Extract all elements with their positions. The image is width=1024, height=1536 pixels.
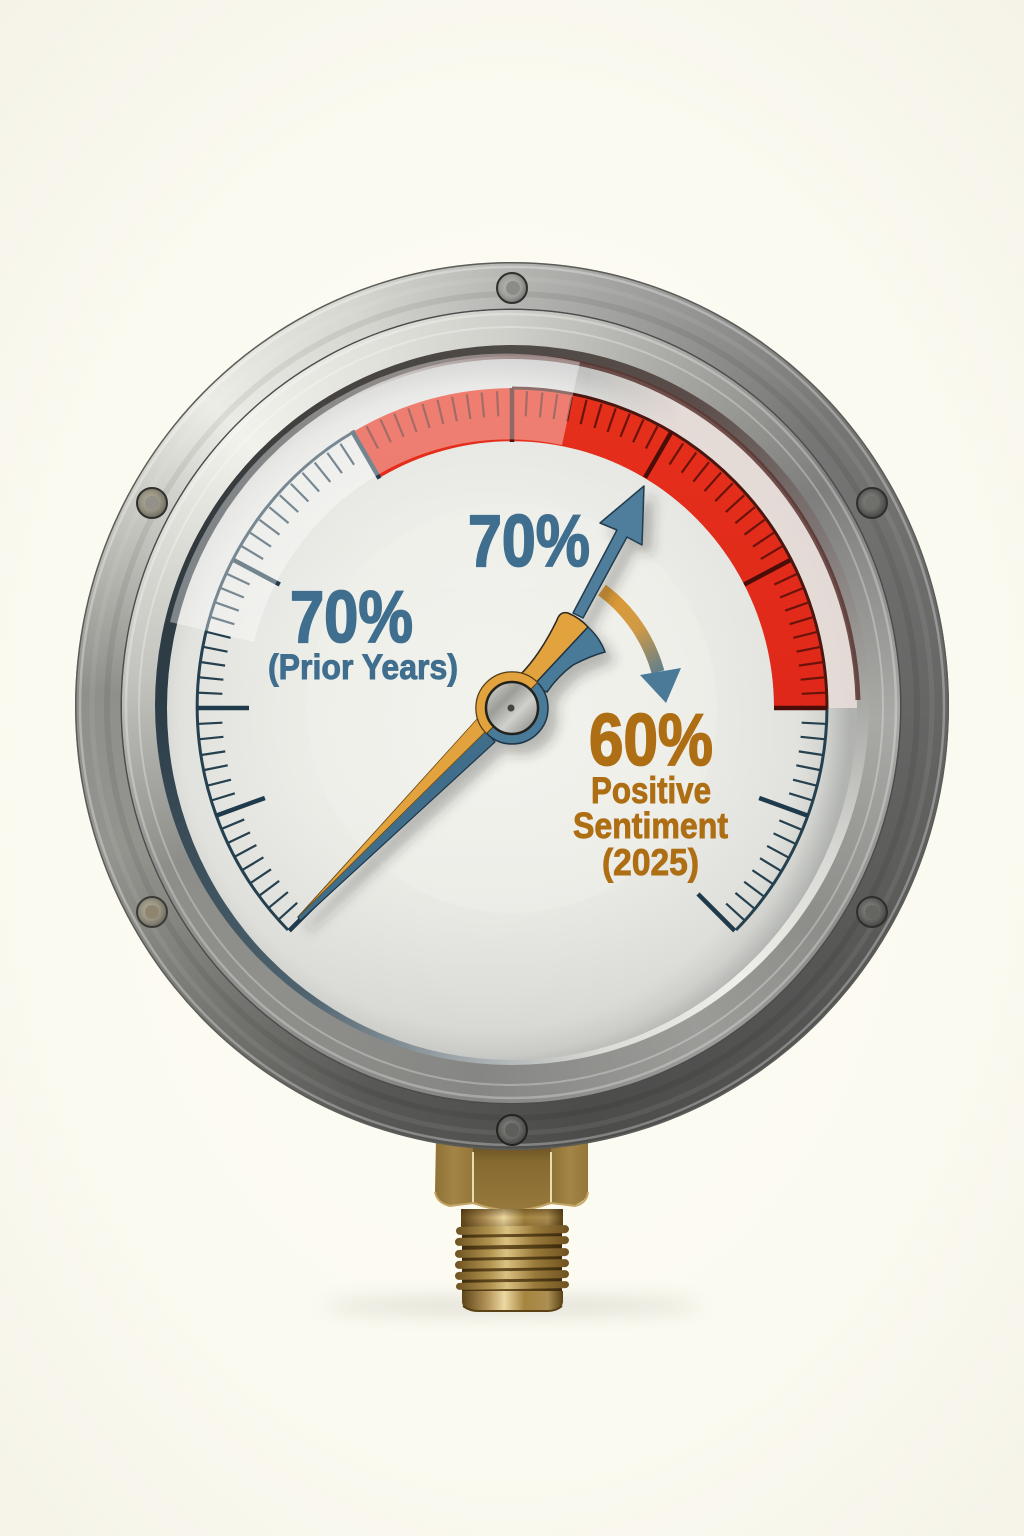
label: 60% positive sentiment 2025: (2025)	[602, 842, 699, 883]
label: 60% positive sentiment 2025: Positive	[591, 770, 711, 811]
threaded stem	[455, 1209, 569, 1311]
scale outline	[197, 388, 827, 930]
needle	[298, 486, 644, 921]
inner rim	[155, 345, 869, 1065]
screw: upper left	[137, 488, 167, 518]
label: 70% prior years: 70%	[290, 577, 413, 658]
screw: top	[497, 273, 527, 303]
red scale band	[354, 388, 827, 708]
needle hub	[476, 672, 548, 744]
bezel brushing lines	[80, 267, 944, 1145]
screw: lower left	[137, 897, 167, 927]
inner bezel ring	[122, 310, 900, 1103]
outer bezel ring	[75, 262, 949, 1150]
label: 70% prior years	[268, 577, 458, 687]
label: 70% top: 70%	[468, 501, 590, 582]
needle tail	[298, 720, 495, 921]
label: 60% positive sentiment 2025: 60%	[589, 700, 713, 781]
scale ticks	[197, 388, 827, 931]
label: 60% positive sentiment 2025: Sentiment	[573, 805, 728, 846]
hex nut	[435, 1140, 588, 1211]
label: 70% prior years: (Prior Years)	[268, 648, 458, 687]
glass reflection	[170, 354, 580, 642]
needle head	[520, 613, 588, 687]
dial face	[167, 356, 858, 1060]
arrow: decline arc from 70% to 60%	[602, 590, 681, 703]
label: 60% positive sentiment 2025	[573, 700, 728, 883]
screw: lower right	[857, 897, 887, 927]
needle blue arrow	[573, 486, 644, 618]
screw: upper right	[857, 488, 887, 518]
screw: bottom	[497, 1115, 527, 1145]
